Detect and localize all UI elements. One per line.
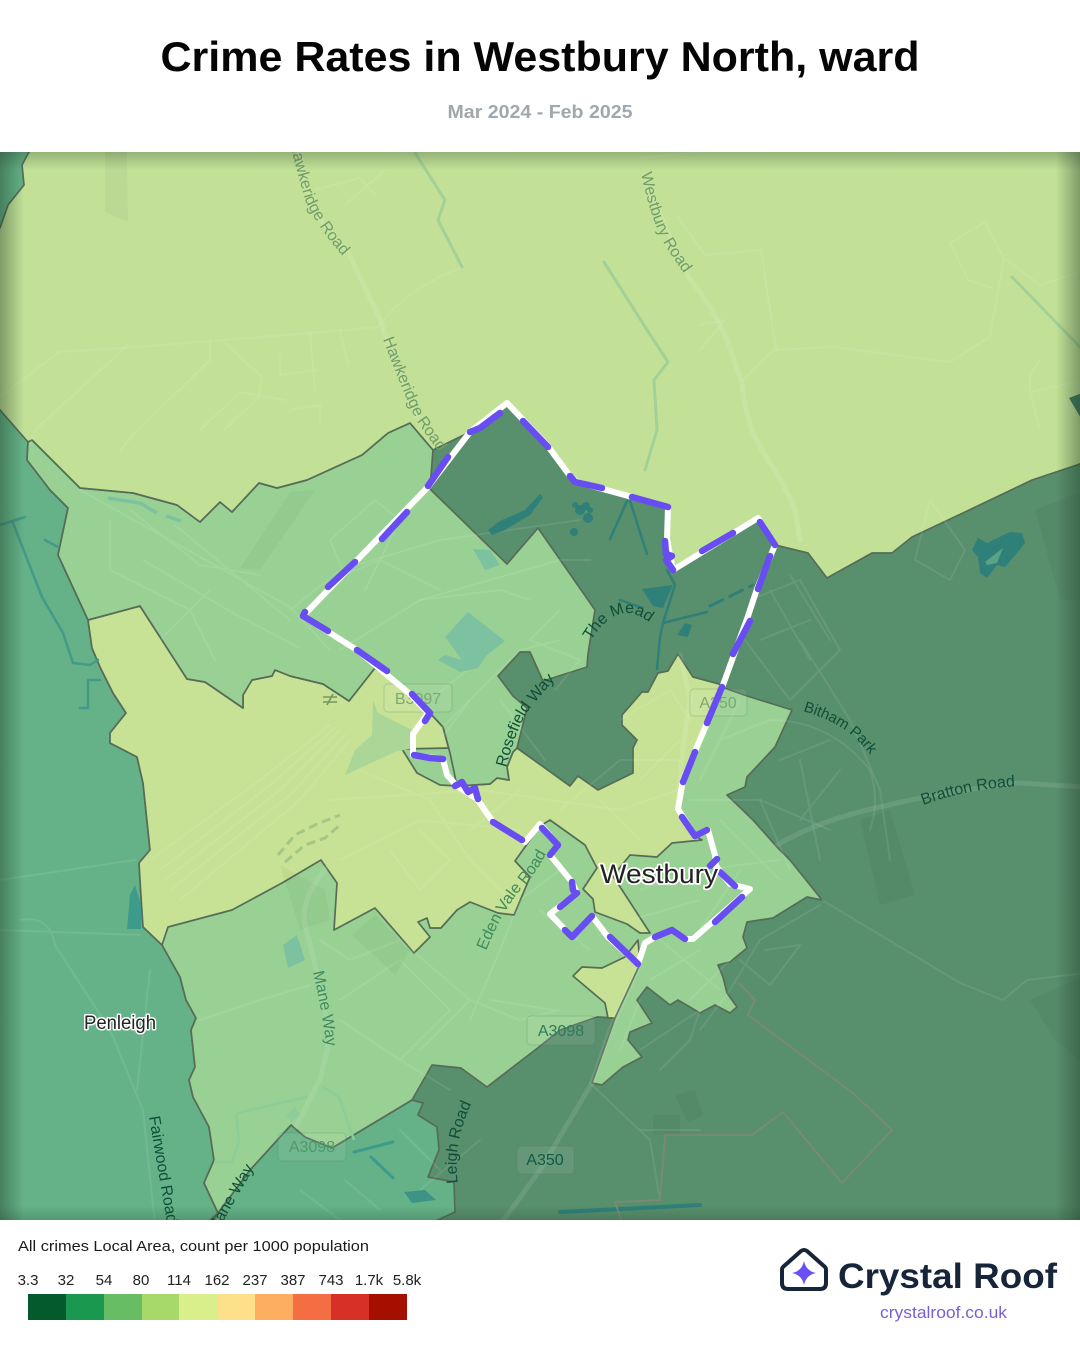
label: The Mead: The Mead	[582, 602, 655, 637]
parish boundary line	[615, 982, 892, 1225]
legend scale labels: 5.8k	[393, 1272, 422, 1289]
road labels	[149, 152, 1014, 1220]
road shield: A350 south: A350	[526, 1152, 564, 1169]
region: north-east corner area	[1069, 394, 1080, 416]
legend scale labels: 80	[133, 1272, 149, 1289]
region: pale wedge south of ward	[573, 940, 640, 1018]
label: Eden Vale Road: Eden Vale Road	[476, 848, 546, 950]
subtitle: date range: Mar 2024 - Feb 2025	[448, 101, 632, 122]
logo: Crystal Roof	[782, 1250, 1057, 1322]
place label: Penleigh: Penleigh	[84, 1013, 156, 1034]
legend scale labels: 743	[318, 1272, 344, 1289]
road shield: B3097: B3097	[395, 691, 441, 708]
label: Hawkeridge Road south: Hawkeridge Road	[384, 336, 448, 451]
legend scale labels: 162	[204, 1272, 230, 1289]
region: southern teal area	[210, 1100, 455, 1225]
title: Crime Rates in Westbury North, ward	[160, 33, 920, 80]
icon: railway station	[323, 694, 337, 705]
label: Bratton Road: Bratton Road	[920, 774, 1014, 805]
legend scale labels: 387	[280, 1272, 306, 1289]
road shield: A3098 west: A3098	[289, 1139, 335, 1156]
icon: house with star	[782, 1250, 826, 1289]
legend scale labels: 1.7k	[355, 1272, 384, 1289]
road shield: A3098 east	[527, 1016, 595, 1045]
road network	[0, 150, 1080, 1225]
region: south and east green area	[160, 677, 822, 1213]
region: northern pale area	[0, 150, 1080, 578]
label: Hawkeridge Road north: Hawkeridge Road	[292, 152, 351, 256]
wordmark: Crystal Roof	[838, 1257, 1057, 1296]
label: Mane Way north: Mane Way	[313, 970, 336, 1046]
label: Fairwood Road: Fairwood Road	[149, 1116, 178, 1220]
label: Leigh Road: Leigh Road	[445, 1100, 471, 1183]
legend	[18, 1238, 422, 1320]
label: Bitham Park: Bitham Park	[804, 702, 876, 755]
railway yard detail	[278, 815, 340, 862]
label: Mane Way south: Mane Way	[212, 1164, 254, 1220]
road shield: A3098 west	[278, 1133, 346, 1161]
region: western low-crime area	[0, 150, 218, 1225]
legend scale labels	[18, 1272, 422, 1289]
legend title: All crimes Local Area, count per 1000 population	[18, 1238, 369, 1255]
website url: crystalroof.co.uk	[880, 1304, 1008, 1322]
legend scale labels: 237	[242, 1272, 268, 1289]
legend scale labels: 32	[58, 1272, 74, 1289]
label: Rosefield Way: Rosefield Way	[496, 674, 554, 766]
road shield: A3098 east: A3098	[538, 1023, 584, 1040]
region: small green sliver	[402, 748, 457, 786]
legend scale labels: 3.3	[18, 1272, 38, 1289]
road shield: A350 south	[517, 1146, 574, 1174]
region: central pale area	[88, 606, 723, 953]
legend scale labels: 114	[167, 1272, 191, 1289]
place label: Westbury: Westbury	[600, 859, 719, 889]
region: north-west green area	[27, 423, 595, 786]
ward boundary	[303, 403, 775, 964]
legend scale labels: 54	[96, 1272, 112, 1289]
legend colour ramp	[28, 1294, 407, 1320]
streams and water	[0, 153, 1080, 1212]
road shield: A350 north: A350	[699, 695, 737, 712]
road shield: A350 north	[690, 689, 747, 716]
label: Westbury Road: Westbury Road	[642, 171, 693, 272]
map edge vignette	[0, 152, 1080, 1220]
field patches	[105, 152, 1080, 1135]
purple dashes along ward boundary	[303, 413, 775, 964]
road shield: B3097	[384, 684, 452, 712]
